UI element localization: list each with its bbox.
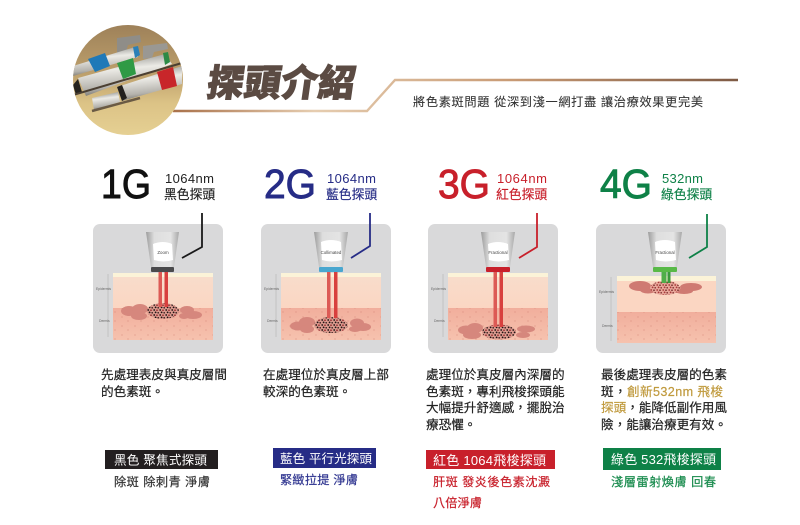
column 1G (93, 161, 227, 489)
title: 探頭介紹 (204, 62, 358, 104)
callout line: 1G (182, 213, 202, 258)
heading: 2G: 2G (264, 161, 316, 207)
panel: 1G skin diagram: Dermis (99, 319, 110, 323)
panel: 4G skin diagram: Dermis (602, 324, 613, 328)
column 4G (596, 161, 727, 489)
callout line: 4G (689, 214, 707, 258)
description: 3G: 色素斑，專利飛梭探頭能 (426, 384, 565, 399)
tag: 1G: 黑色 聚焦式探頭 (114, 452, 207, 468)
wavelength: 4G: 532nm (662, 171, 703, 186)
description: 2G: 在處理位於真皮層上部 (263, 367, 389, 382)
tag: 2G (273, 448, 376, 468)
tag: 1G (105, 450, 218, 469)
treatments: 3G: 肝斑 發炎後色素沈澱 (433, 474, 550, 489)
panel: 2G skin diagram: Collimated (321, 250, 342, 255)
description: 4G: 最後處理表皮層的色素 (601, 367, 727, 382)
tag: 3G: 紅色 1064飛梭探頭 (433, 453, 546, 468)
wavelength: 2G: 1064nm (327, 171, 376, 186)
description: 4G: 斑，創新532nm 飛梭 (601, 384, 723, 399)
tag: 4G (603, 448, 721, 470)
tag: 2G: 藍色 平行光探頭 (280, 451, 372, 466)
callout line: 2G (351, 213, 370, 258)
probe name: 2G: 藍色探頭 (326, 187, 377, 202)
panel: 3G skin diagram: Fractional (488, 250, 508, 255)
description: 1G (101, 368, 227, 399)
tag: 4G: 綠色 532飛梭探頭 (611, 452, 716, 467)
subtitle: 將色素斑問題 從深到淺一網打盡 讓治療效果更完美 (413, 94, 703, 109)
description: 4G: 探頭，能降低副作用風 (601, 400, 727, 415)
treatments: 3G (433, 474, 550, 510)
description: 2G: 較深的色素斑。 (263, 384, 351, 399)
panel: 3G skin diagram: Dermis (434, 319, 445, 323)
description: 1G: 先處理表皮與真皮層間 (101, 368, 227, 382)
wavelength: 3G: 1064nm (497, 171, 547, 186)
infographic canvas (73, 25, 738, 508)
treatments: 1G: 除斑 除刺青 淨膚 (114, 474, 210, 489)
panel: 1G skin diagram: Zoom (157, 250, 169, 255)
panel: 4G skin diagram: Epidermis (599, 290, 614, 294)
panel: 4G skin diagram (596, 224, 726, 353)
description: 3G: 療恐懼。 (426, 418, 476, 432)
probe name: 1G: 黑色探頭 (164, 187, 215, 202)
panel: 1G skin diagram: Epidermis (96, 287, 111, 291)
probe name: 3G: 紅色探頭 (496, 187, 547, 202)
description: 4G: 險，能讓治療更有效。 (601, 417, 727, 432)
description: 3G: 處理位於真皮層內深層的 (426, 367, 565, 382)
description: 4G (601, 367, 727, 432)
description: 2G (263, 367, 389, 399)
panel: 3G skin diagram (428, 224, 558, 353)
panel: 2G skin diagram: Epidermis (264, 287, 279, 291)
header rule (173, 80, 738, 111)
heading: 4G: 4G (600, 161, 652, 207)
probe name: 4G: 綠色探頭 (661, 187, 712, 202)
tag: 3G (426, 450, 555, 469)
treatments: 2G: 緊緻拉提 淨膚 (280, 472, 358, 487)
treatments: 3G: 八倍淨膚 (433, 495, 482, 510)
description: 1G: 的色素斑。 (101, 384, 164, 399)
description: 3G (426, 367, 565, 432)
column 2G (261, 161, 391, 487)
panel: 4G skin diagram: Fractional (655, 250, 675, 255)
column 3G (426, 161, 565, 510)
panel: 1G skin diagram (93, 224, 223, 353)
heading: 3G: 3G (438, 161, 490, 207)
callout line: 3G (519, 213, 537, 258)
panel: 3G skin diagram: Epidermis (431, 287, 446, 291)
wavelength: 1G: 1064nm (165, 171, 214, 186)
treatments: 4G: 淺層雷射煥膚 回春 (611, 474, 716, 489)
description: 3G: 大幅提升舒適感，擺脫治 (426, 400, 565, 415)
heading: 1G: 1G (101, 161, 151, 207)
icon: probe photo (73, 25, 183, 135)
panel: 2G skin diagram (261, 224, 391, 353)
panel: 2G skin diagram: Dermis (267, 319, 278, 323)
